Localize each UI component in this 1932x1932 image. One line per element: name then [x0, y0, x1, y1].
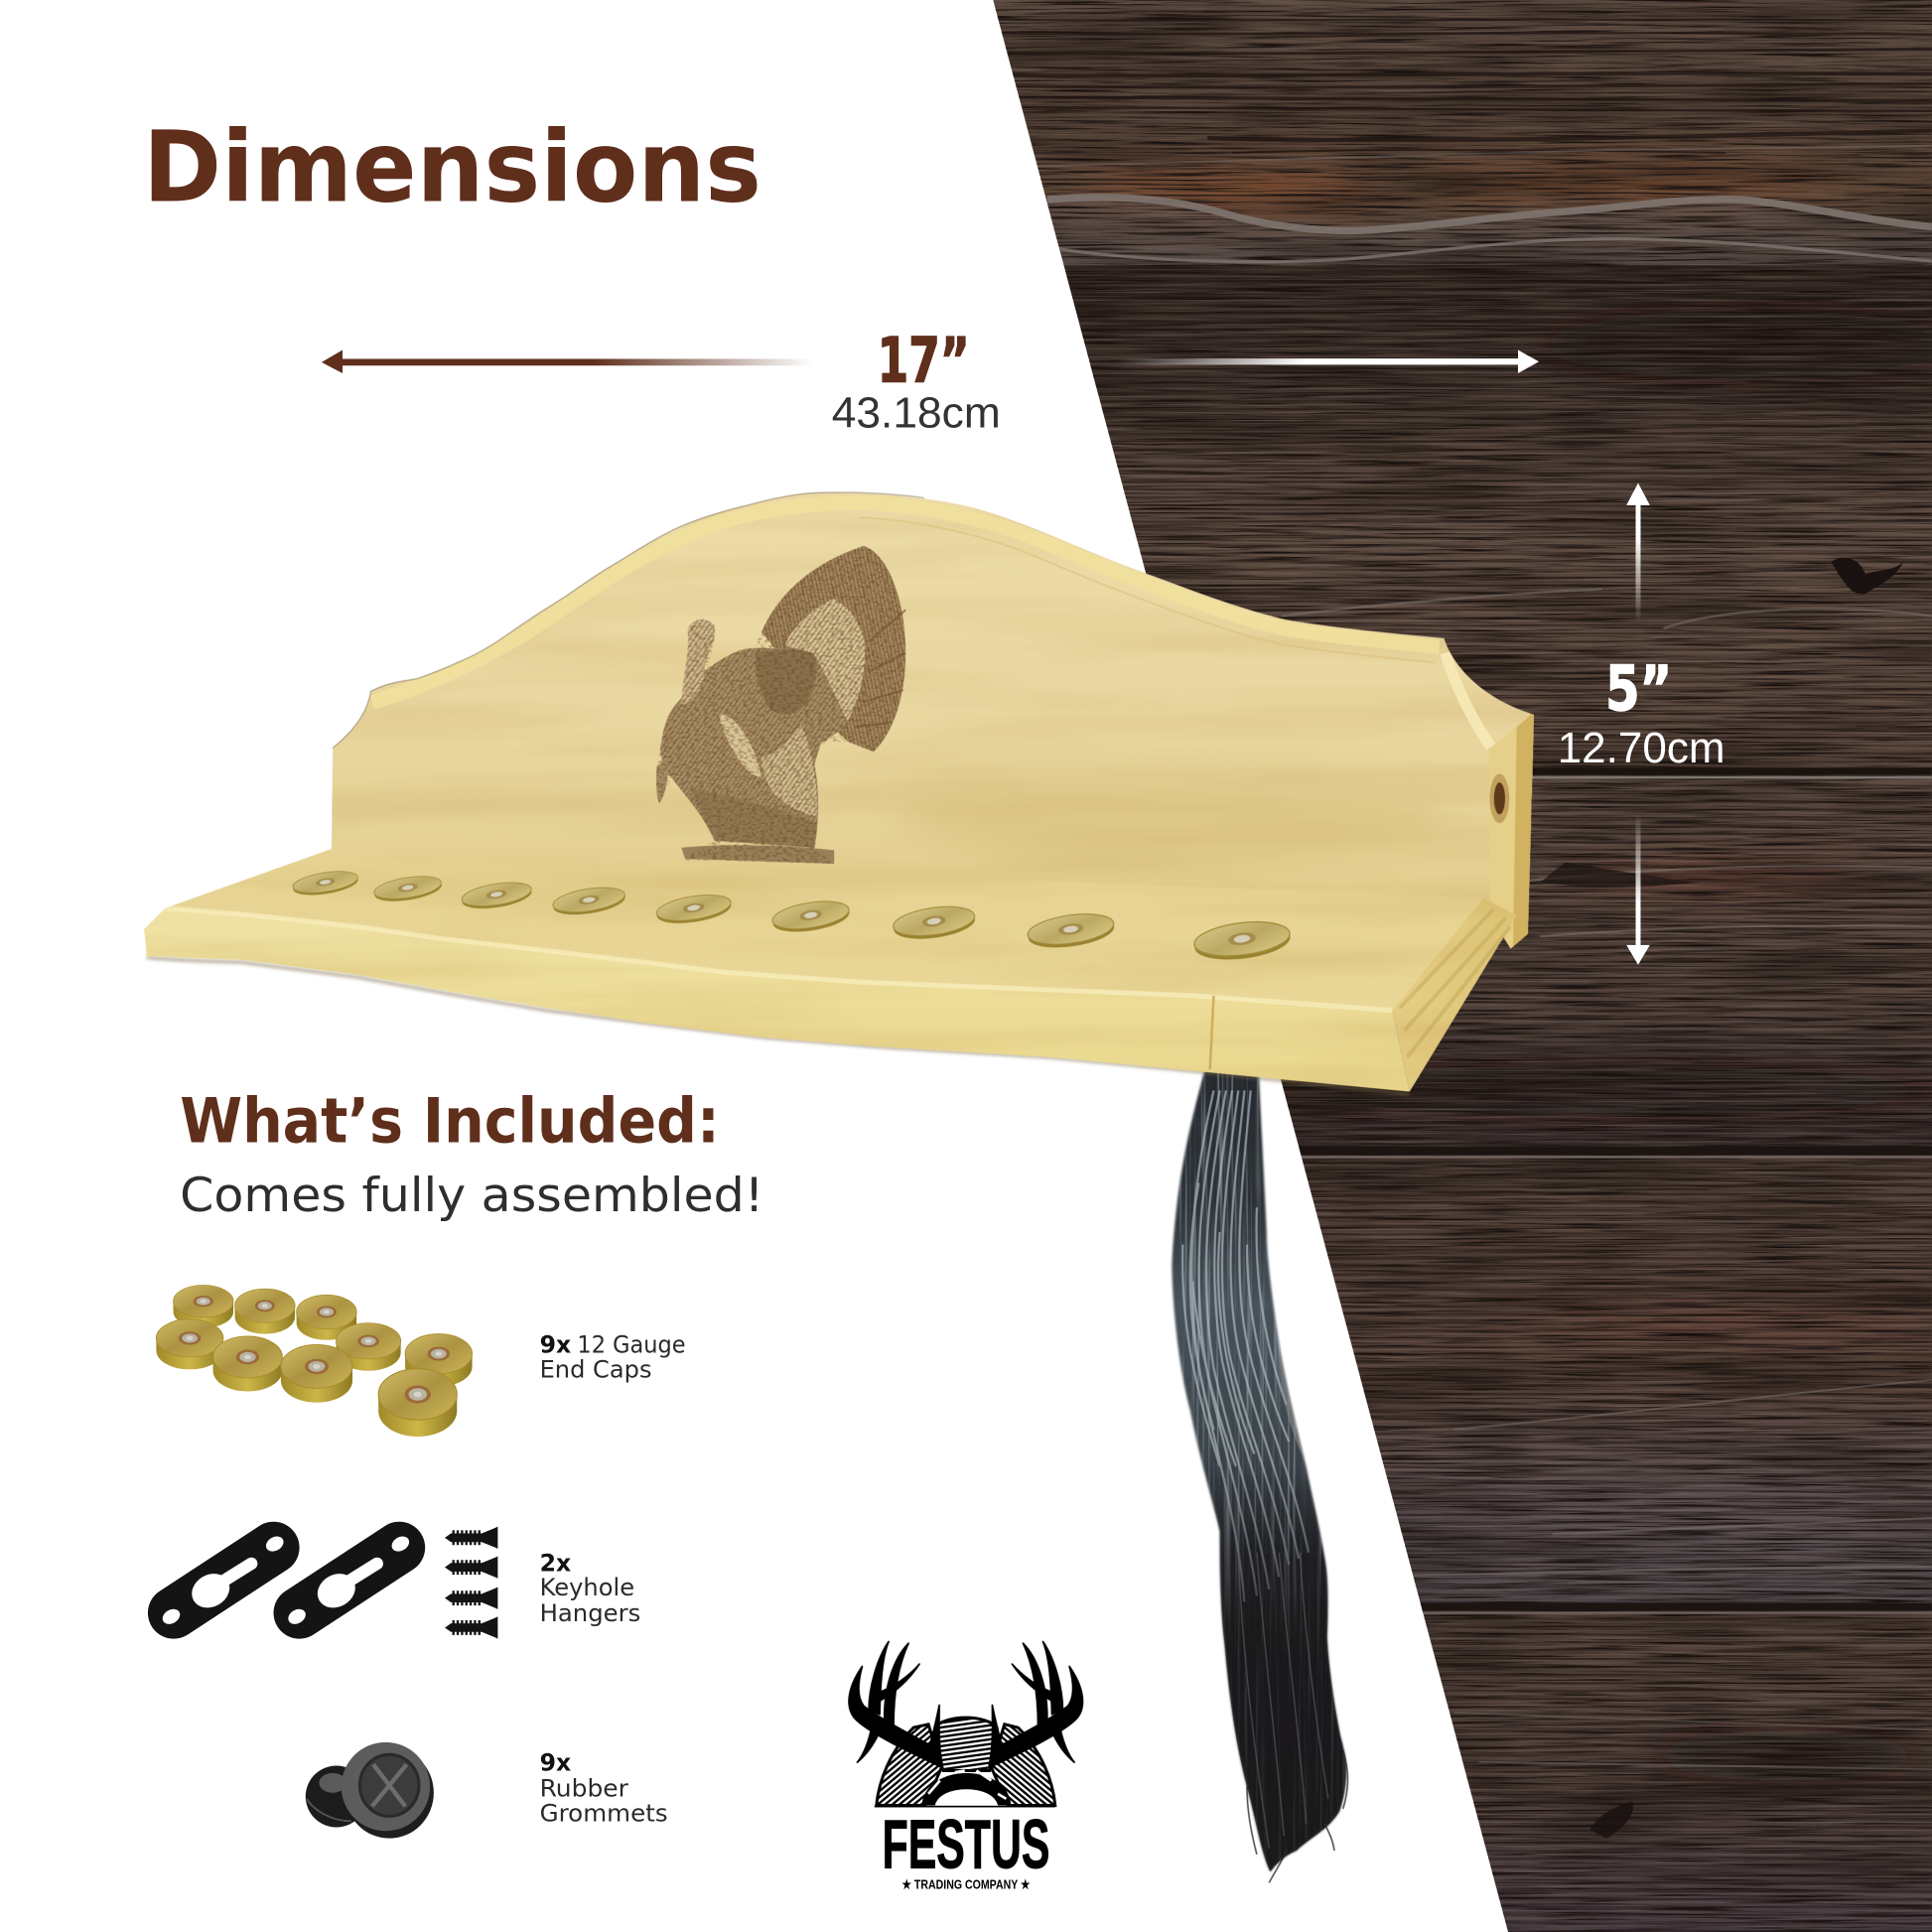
plank seams — [986, 266, 1932, 1613]
light lower wing — [761, 725, 817, 817]
side edge — [1489, 712, 1534, 949]
hanger 1 — [160, 1533, 286, 1627]
icon: brass end caps — [156, 1285, 473, 1437]
width label: 17” — [878, 325, 970, 397]
plank 3 — [1281, 770, 1932, 1152]
right antler — [989, 1641, 1083, 1767]
dark lines in top plank — [993, 20, 1932, 153]
back panel — [332, 492, 1534, 949]
shelf right end grain — [1392, 898, 1517, 1092]
width label — [832, 325, 1001, 438]
hair strand texture — [1159, 1059, 1368, 1885]
label: keyhole hangers: Hangers — [540, 1599, 640, 1627]
ground — [681, 845, 834, 864]
shelf shadow — [147, 957, 1410, 1094]
light feather band — [785, 599, 865, 721]
loose hair ends — [1247, 1749, 1347, 1882]
horse hair tail — [1159, 1059, 1368, 1885]
label: grommets: 9x — [540, 1748, 571, 1776]
hanger 2 — [286, 1533, 412, 1627]
plank 1 — [986, 0, 1932, 265]
turkey engraving — [653, 542, 911, 869]
burn knot — [1489, 773, 1509, 823]
arrow: height down — [1626, 813, 1650, 965]
label: keyhole hangers: Keyhole — [540, 1574, 634, 1601]
plank 2 — [986, 265, 1932, 770]
tail fan — [761, 546, 905, 752]
fine parallel grain lines: plank 2 to 5 — [986, 274, 1932, 1932]
height label: 5” — [1605, 652, 1672, 725]
wood plank background — [986, 0, 1932, 1932]
shelf top face — [165, 849, 1517, 1011]
tail feather bars — [857, 610, 905, 727]
shelf product — [136, 492, 1540, 1097]
lower strands — [1238, 1553, 1328, 1849]
neck and head — [681, 620, 715, 705]
shelf front bevel — [144, 908, 1410, 1092]
wavy grain highlights in top plank — [1035, 145, 1932, 1769]
center fan — [934, 1718, 998, 1770]
plank 5 — [1422, 1608, 1932, 1932]
subheading: Comes fully assembled! — [180, 1169, 763, 1223]
brass end caps on shelf — [292, 868, 1292, 964]
center arch — [921, 1773, 1011, 1805]
raised rim — [372, 502, 1440, 702]
corner notch shine — [1446, 653, 1491, 747]
light grain — [986, 0, 1932, 1932]
plank 4 — [1301, 1152, 1932, 1608]
hair strands — [1182, 1090, 1309, 1601]
tan shading — [899, 761, 1442, 865]
arrow: width left — [322, 349, 813, 373]
label: end caps: 9x — [540, 1331, 571, 1359]
body — [660, 648, 848, 848]
arrow: height up — [1626, 483, 1650, 622]
dark lower tail overlay — [1159, 1453, 1368, 1885]
height label: 12.70cm — [1558, 725, 1725, 772]
lower breast shading — [690, 788, 817, 848]
width label: 43.18cm — [832, 390, 1001, 438]
logo tagline: ★ TRADING COMPANY ★ — [901, 1877, 1031, 1892]
heading: what's included: What’s Included: — [180, 1084, 720, 1157]
grey band between wavy lines — [1047, 201, 1932, 264]
feather speckle texture — [653, 542, 911, 869]
light wing lobe — [719, 715, 761, 777]
breast beard — [656, 758, 669, 803]
dark saddle — [756, 648, 817, 714]
label: grommets: Rubber — [540, 1774, 628, 1802]
screws — [445, 1527, 497, 1639]
height label — [1558, 652, 1725, 772]
logo wordmark: FESTUS — [883, 1805, 1049, 1882]
dark grain — [986, 0, 1932, 1932]
label: grommets: Grommets — [540, 1799, 668, 1827]
right fan — [991, 1725, 1055, 1805]
icon: keyhole hangers — [160, 1527, 497, 1639]
left fan — [877, 1725, 941, 1805]
arrow: width right — [1115, 349, 1539, 373]
label: keyhole hangers: 2x — [540, 1549, 571, 1577]
label: end caps: End Caps — [540, 1356, 652, 1384]
left antler — [849, 1641, 942, 1767]
thin top outline — [333, 492, 924, 748]
base line — [875, 1806, 1055, 1807]
dark blotches — [986, 0, 1932, 1932]
warm tone patches — [1084, 168, 1932, 1780]
logo: festus trading company — [849, 1641, 1083, 1892]
icon: rubber grommets — [306, 1742, 434, 1839]
logo emblem — [849, 1641, 1083, 1807]
title: Dimensions — [143, 110, 761, 224]
grey shaded edge — [1281, 1330, 1355, 1478]
knots — [1540, 558, 1903, 1839]
label: end caps: 12 Gauge — [577, 1331, 686, 1359]
